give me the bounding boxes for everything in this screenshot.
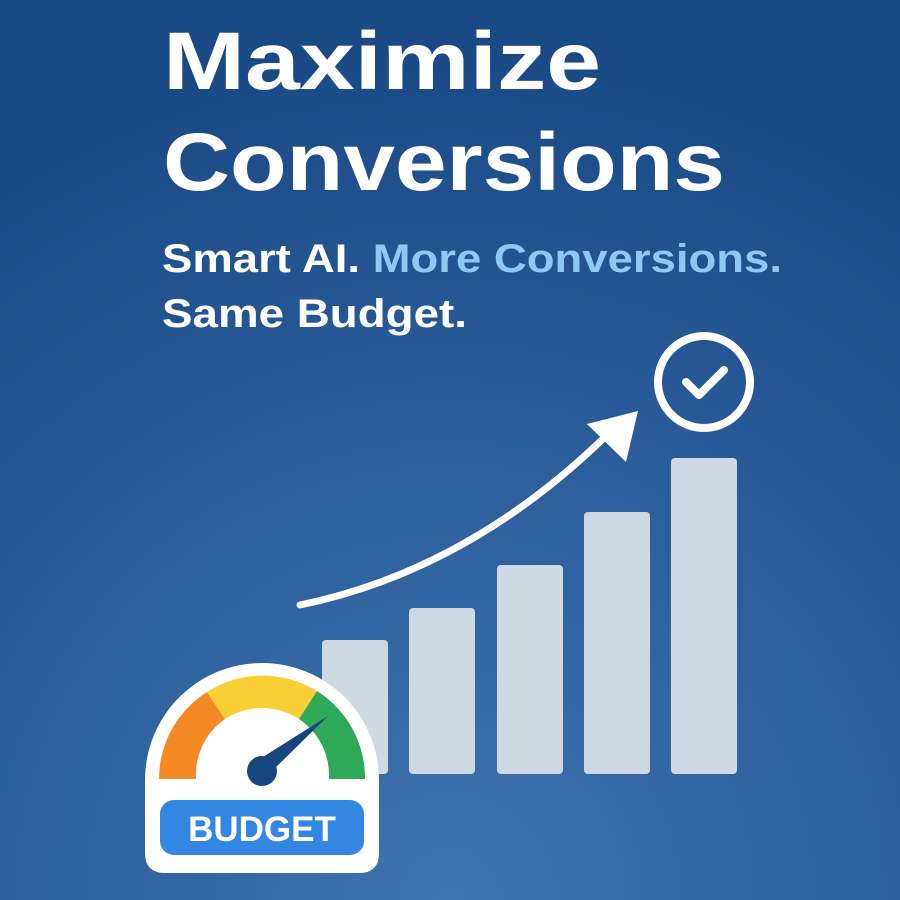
title: Maximize (163, 16, 601, 107)
icon: budget gauge badge (145, 663, 379, 873)
arrow: growth trend (300, 411, 638, 605)
subtitle: Smart AI. More Conversions. (162, 237, 782, 281)
title: Conversions (163, 117, 725, 208)
icon: check circle (658, 336, 750, 428)
subtitle: Same Budget. (162, 292, 467, 336)
subtitle (162, 237, 782, 336)
title (163, 16, 725, 208)
bar chart (322, 458, 737, 774)
icon: budget gauge badge: BUDGET (188, 810, 336, 849)
